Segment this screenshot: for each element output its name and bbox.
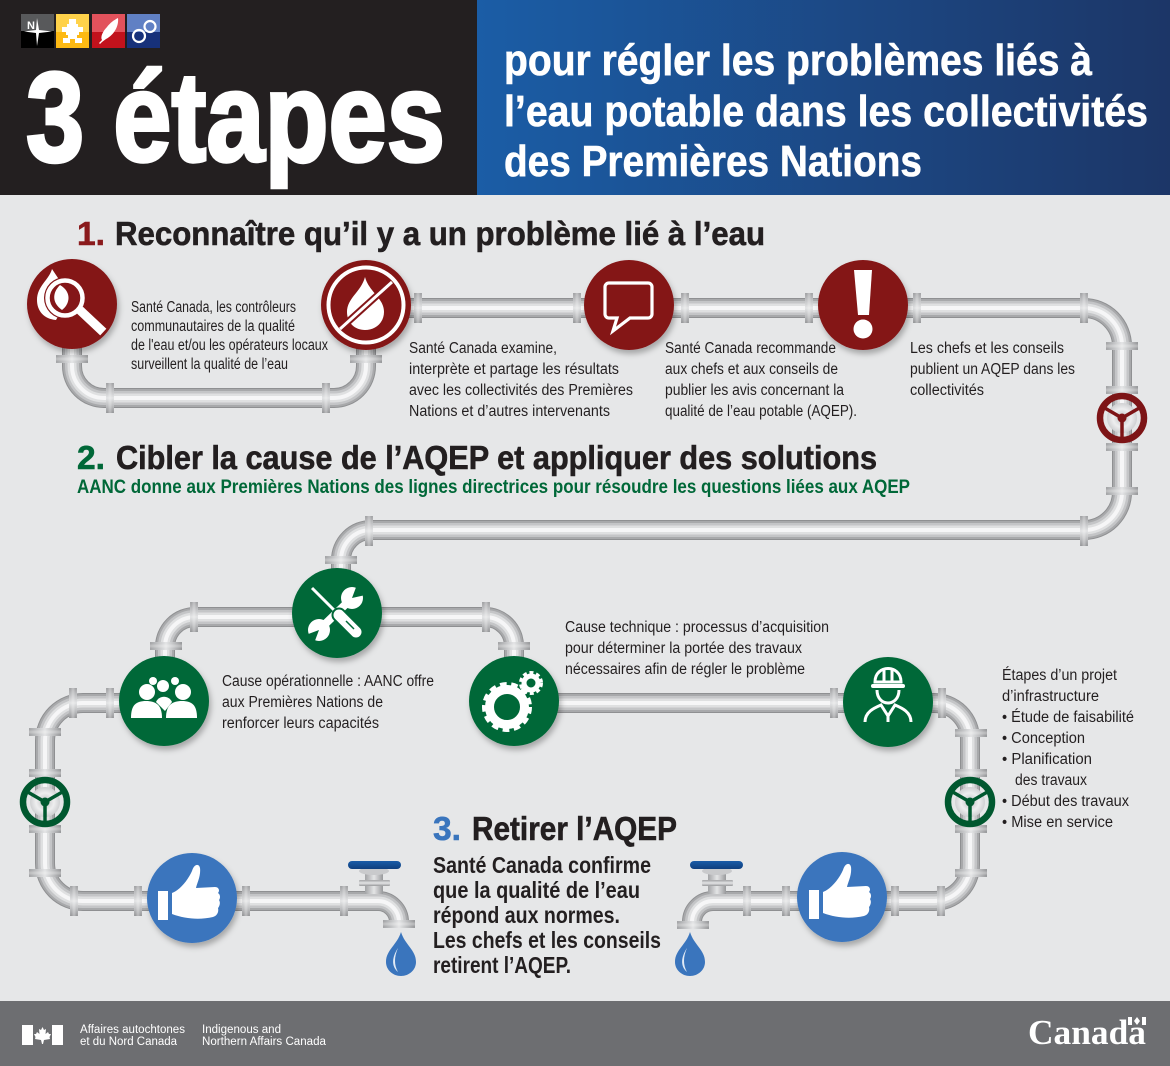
list: infrastructure project steps: • Étude de faisabilité [1002,709,1134,726]
icon: green valve wheel right [948,780,992,824]
footer band [0,1001,1170,1066]
step 1 text: monitoring: Santé Canada, les contrôleurs [131,299,296,316]
footer text: English department name: Northern Affairs Canada [202,1036,327,1048]
icon: group of people [119,656,209,746]
step 2 text: technical cause: pour déterminer la portée des travaux [565,640,802,657]
step 2 text: technical cause: Cause technique : processus d’acquisition [565,619,829,636]
step 1 text: chiefs publish: publient un AQEP dans les [910,361,1075,378]
step 1 text: recommendation: qualité de l’eau potable (AQEP). [665,403,857,420]
step 1 text: Health Canada review [409,340,633,420]
list: infrastructure project steps: Étapes d’un projet [1002,667,1118,684]
icon: right faucet handle [690,861,743,894]
icon: Northern compass badge [21,14,54,48]
icon: wrench and screwdriver [292,568,382,658]
title: 3 étapes: 3 étapes [26,46,445,188]
step 1 text: Health Canada review: Nations et d’autres intervenants [409,403,610,420]
pipe: wrench branches [150,602,530,665]
list: infrastructure project steps: des travaux [1015,772,1087,789]
step 1 text: chiefs publish: collectivités [910,382,984,399]
Canada wordmark: Canada [1028,1013,1146,1052]
footer text: French department name: et du Nord Canada [80,1036,178,1048]
step 1 text: recommendation: aux chefs et aux conseils de [665,361,838,378]
step 2 text: operational cause: aux Premières Nations de [222,694,383,711]
icon: red valve wheel [1100,396,1144,440]
step 3 text: Les chefs et les conseils [433,927,661,953]
footer text: French department name [80,1024,185,1048]
pipe: from step 1 around red valve to wrench icon [325,293,1138,578]
step 1 text: monitoring: surveillent la qualité de l’eau [131,356,288,373]
step 2 text: operational cause: Cause opérationnelle : AANC offre [222,673,434,690]
header: blue subtitle panel [477,0,1170,195]
icon: gears [469,656,559,746]
icon: green valve wheel left [23,780,67,824]
list: infrastructure project steps: d’infrastructure [1002,688,1099,705]
step 1 text: chiefs publish [910,340,1075,399]
step 3 text: que la qualité de l’eau [433,877,640,903]
icon: inukshuk badge [56,14,89,48]
icon: Northern compass badge: N [27,20,35,32]
heading: step 3: Retirer l’AQEP [472,811,677,848]
heading: step 2: 2. [77,440,105,477]
list: infrastructure project steps: • Début des travaux [1002,793,1129,810]
icon: no water drop [321,260,411,350]
heading: step 2 [77,440,910,498]
step 1 text: Health Canada review: Santé Canada examine, [409,340,557,357]
list: infrastructure project steps [1002,667,1134,831]
footer text: English department name: Indigenous and [202,1024,281,1036]
icon: thumbs up right [797,852,887,942]
step 3 text: Santé Canada confirme [433,852,651,878]
heading: step 1: Reconnaître qu’il y a un problème lié à l’eau [115,216,765,253]
footer text: French department name: Affaires autochtones [80,1024,185,1036]
icon: feather badge [92,14,125,48]
list: infrastructure project steps: • Conception [1002,730,1085,747]
icon: infinity badge [127,14,160,48]
step 1 text: Health Canada review: avec les collectivités des Premières [409,382,633,399]
step 2 text: technical cause: nécessaires afin de régler le problème [565,661,805,678]
heading: step 2: Cibler la cause de l’AQEP et appliquer des solutions [116,440,877,477]
step 1 text: recommendation: publier les avis concernant la [665,382,844,399]
step 1 text: recommendation: Santé Canada recommande [665,340,836,357]
icon: magnifying glass over water drop [27,259,117,349]
list: infrastructure project steps: • Mise en service [1002,814,1113,831]
step 1 text: monitoring: de l'eau et/ou les opérateurs locaux [131,337,328,354]
pipe: step 1 lower loop [56,345,382,413]
header: black title panel [0,0,477,195]
step 1 text: recommendation [665,340,857,420]
icon: left faucet handle [348,861,401,894]
header: blue subtitle panel: des Premières Nations [504,137,922,186]
pipe: left run to faucet [29,688,415,928]
step 3 text: répond aux normes. [433,902,620,928]
icon: right water drop [675,932,705,976]
icon: left water drop [386,932,416,976]
step 3 text [433,852,661,978]
heading: step 3: 3. [433,811,461,848]
icon: worker with hard hat [843,657,933,747]
icon: thumbs up left [147,853,237,943]
heading: step 1: 1. [77,216,105,253]
header: blue subtitle panel: pour régler les problèmes liés à [504,36,1092,85]
step 1 text: monitoring [131,299,328,373]
footer text: English department name [202,1024,327,1048]
step 3 text: retirent l’AQEP. [433,952,571,978]
icon: Canadian flag signature [22,1025,63,1045]
step 1 text: Health Canada review: interprète et partage les résultats [409,361,619,378]
step 1 text: monitoring: communautaires de la qualité [131,318,295,335]
icon: speech bubble [584,260,674,350]
step 2 text: technical cause [565,619,829,678]
icon: exclamation mark [818,260,908,350]
step 2 text: operational cause: renforcer leurs capacités [222,715,379,732]
pipe: right run to faucet [530,688,987,929]
subheading: step 2: AANC donne aux Premières Nations des lignes directrices pour résoudre les questions liées aux AQEP [77,477,910,498]
list: infrastructure project steps: • Planification [1002,751,1092,768]
step 2 text: operational cause [222,673,434,732]
step 1 text: chiefs publish: Les chefs et les conseils [910,340,1064,357]
